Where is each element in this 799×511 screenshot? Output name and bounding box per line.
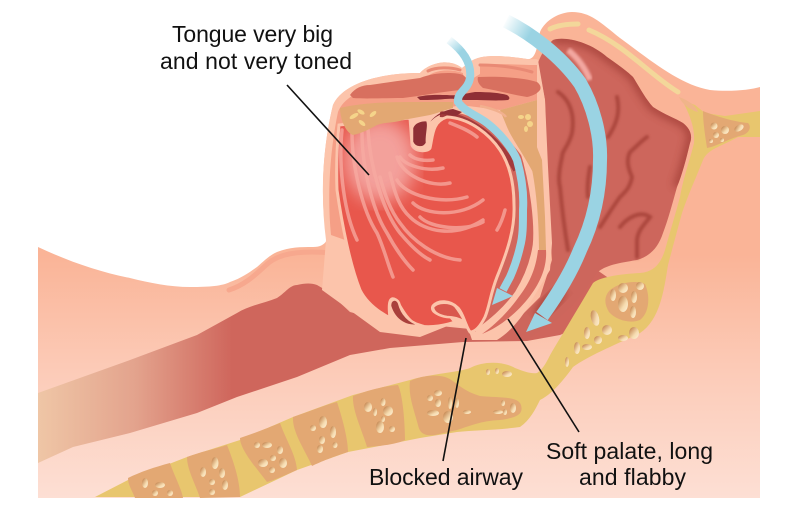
label: tongue: and not very toned <box>160 48 352 74</box>
air flow through mouth <box>506 21 600 316</box>
oral tissue mass <box>322 56 552 340</box>
outer salmon band <box>329 64 537 240</box>
bone pores <box>142 282 644 496</box>
pale slim fold <box>480 106 506 117</box>
left dark pad <box>350 73 467 98</box>
upper palate <box>340 65 541 180</box>
soft palate inner edge <box>476 150 535 332</box>
label: blocked airway: Blocked airway <box>369 464 524 490</box>
vertebra 3 <box>240 423 297 482</box>
nasal bone pores <box>709 122 745 143</box>
spine <box>95 100 760 498</box>
muscle highlight and streaks <box>341 118 505 277</box>
right palate bone <box>500 100 537 180</box>
right pad top stripe <box>480 65 532 72</box>
label: tongue <box>160 21 352 74</box>
vertebra 2 <box>293 402 348 466</box>
palate bone pores <box>349 108 533 132</box>
airway pointer line <box>443 338 466 461</box>
tissue between tongue and throat <box>447 111 536 332</box>
dark pocket <box>412 120 428 147</box>
small yellow nose mark <box>679 97 698 112</box>
label: soft palate <box>546 438 713 490</box>
cavity shaded edge <box>530 39 691 323</box>
dark nasal septum <box>417 92 509 100</box>
chin stripe <box>229 252 342 290</box>
air flow through nose <box>449 40 523 290</box>
cavity folds <box>558 92 650 257</box>
left palate bone <box>340 102 453 135</box>
palate pointer line <box>508 319 579 432</box>
lower shadow patch <box>532 288 568 319</box>
vertebra 1 <box>353 385 405 447</box>
nasal cavity <box>514 38 692 328</box>
nose pale stripe <box>550 24 678 92</box>
skull base bone <box>605 282 648 322</box>
tongue body <box>337 117 514 332</box>
dark tissue strip <box>440 114 516 170</box>
right dark pad <box>478 77 541 97</box>
neck muscle band <box>38 270 640 463</box>
vertebra 5 <box>128 463 183 498</box>
tongue pointer line <box>287 85 369 175</box>
air flow arrow head small <box>492 288 513 305</box>
orange tissue strip <box>530 130 546 250</box>
soft palate <box>482 250 546 334</box>
jaw fold mid <box>433 303 465 322</box>
label: soft palate: Soft palate, long <box>546 438 713 464</box>
left pad top stripe <box>428 68 460 71</box>
vertebra 4 <box>187 445 240 498</box>
label: tongue: Tongue very big <box>172 21 333 47</box>
air flow arrow head large <box>526 313 552 332</box>
nasal bone right <box>703 111 750 148</box>
spine cartilage <box>95 100 760 497</box>
pink highlight <box>568 50 590 80</box>
neck bone fragments <box>410 376 522 435</box>
tongue <box>337 117 514 332</box>
label: soft palate: and flabby <box>579 464 686 490</box>
jaw fold left <box>390 300 465 326</box>
pocket top tissue <box>430 109 462 122</box>
